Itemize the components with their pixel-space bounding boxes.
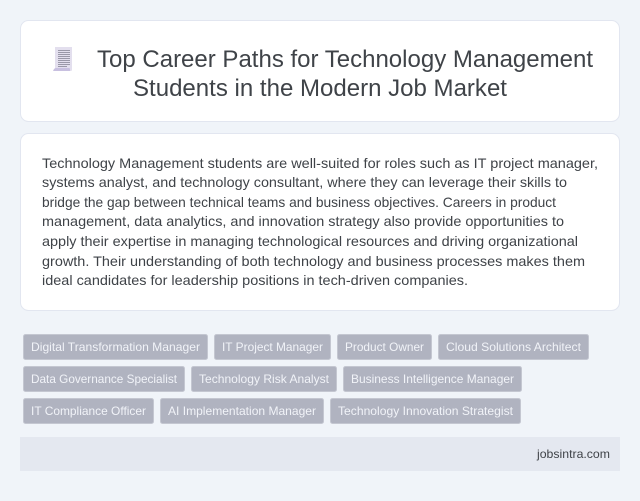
- tag: Technology Innovation Strategist: [330, 398, 520, 424]
- panel: description card: [20, 134, 620, 310]
- tag: Technology Risk Analyst: Technology Risk Analyst: [199, 372, 330, 386]
- tag: Data Governance Specialist: Data Governance Specialist: [31, 372, 178, 386]
- tag: Business Intelligence Manager: Business Intelligence Manager: [351, 372, 514, 386]
- tag: IT Project Manager: IT Project Manager: [222, 340, 323, 354]
- tag: Business Intelligence Manager: [344, 366, 522, 392]
- text block: description: bridge the gap between technical teams and business objectives. Careers in product: [42, 194, 556, 210]
- tag: Digital Transformation Manager: [24, 334, 208, 360]
- tag: IT Compliance Officer: IT Compliance Officer: [31, 404, 146, 418]
- tag: IT Project Manager: [214, 334, 330, 360]
- tag: Data Governance Specialist: [24, 366, 184, 392]
- text block: description: ideal candidates for leadership positions in tech-driven companies.: [42, 272, 468, 288]
- title: [97, 46, 593, 102]
- text block: description: systems analyst, and technology consultant, where they can leverage their skills to: [42, 174, 567, 190]
- tag: AI Implementation Manager: [160, 398, 324, 424]
- tag list: [24, 334, 588, 424]
- text block: description: Technology Management students are well-suited for roles such as IT project manager,: [42, 155, 598, 171]
- panel: header card: [20, 20, 620, 122]
- tag: IT Compliance Officer: [24, 398, 154, 424]
- text block: description: [42, 155, 598, 288]
- title: Top Career Paths for Technology Management: [97, 46, 593, 73]
- footer bar: [20, 437, 620, 471]
- tag: Product Owner: [338, 334, 432, 360]
- icon: document scroll: [53, 47, 72, 71]
- text block: description: management, data analytics, and innovation strategy also provide opportunities to: [42, 213, 564, 229]
- tag: Cloud Solutions Architect: Cloud Solutions Architect: [446, 340, 582, 354]
- footer credit: jobsintra.com: [536, 447, 610, 461]
- tag: Technology Innovation Strategist: Technology Innovation Strategist: [338, 404, 514, 418]
- tag: Digital Transformation Manager: Digital Transformation Manager: [31, 340, 200, 354]
- text block: description: growth. Their understanding of both technology and business processes makes them: [42, 253, 585, 269]
- tag: AI Implementation Manager: AI Implementation Manager: [168, 404, 316, 418]
- tag: Technology Risk Analyst: [192, 366, 336, 392]
- tag: Cloud Solutions Architect: [438, 334, 588, 360]
- title: Students in the Modern Job Market: [133, 75, 507, 102]
- tag: Product Owner: Product Owner: [345, 340, 424, 354]
- text block: description: apply their expertise in managing technological resources and driving organizational: [42, 233, 578, 249]
